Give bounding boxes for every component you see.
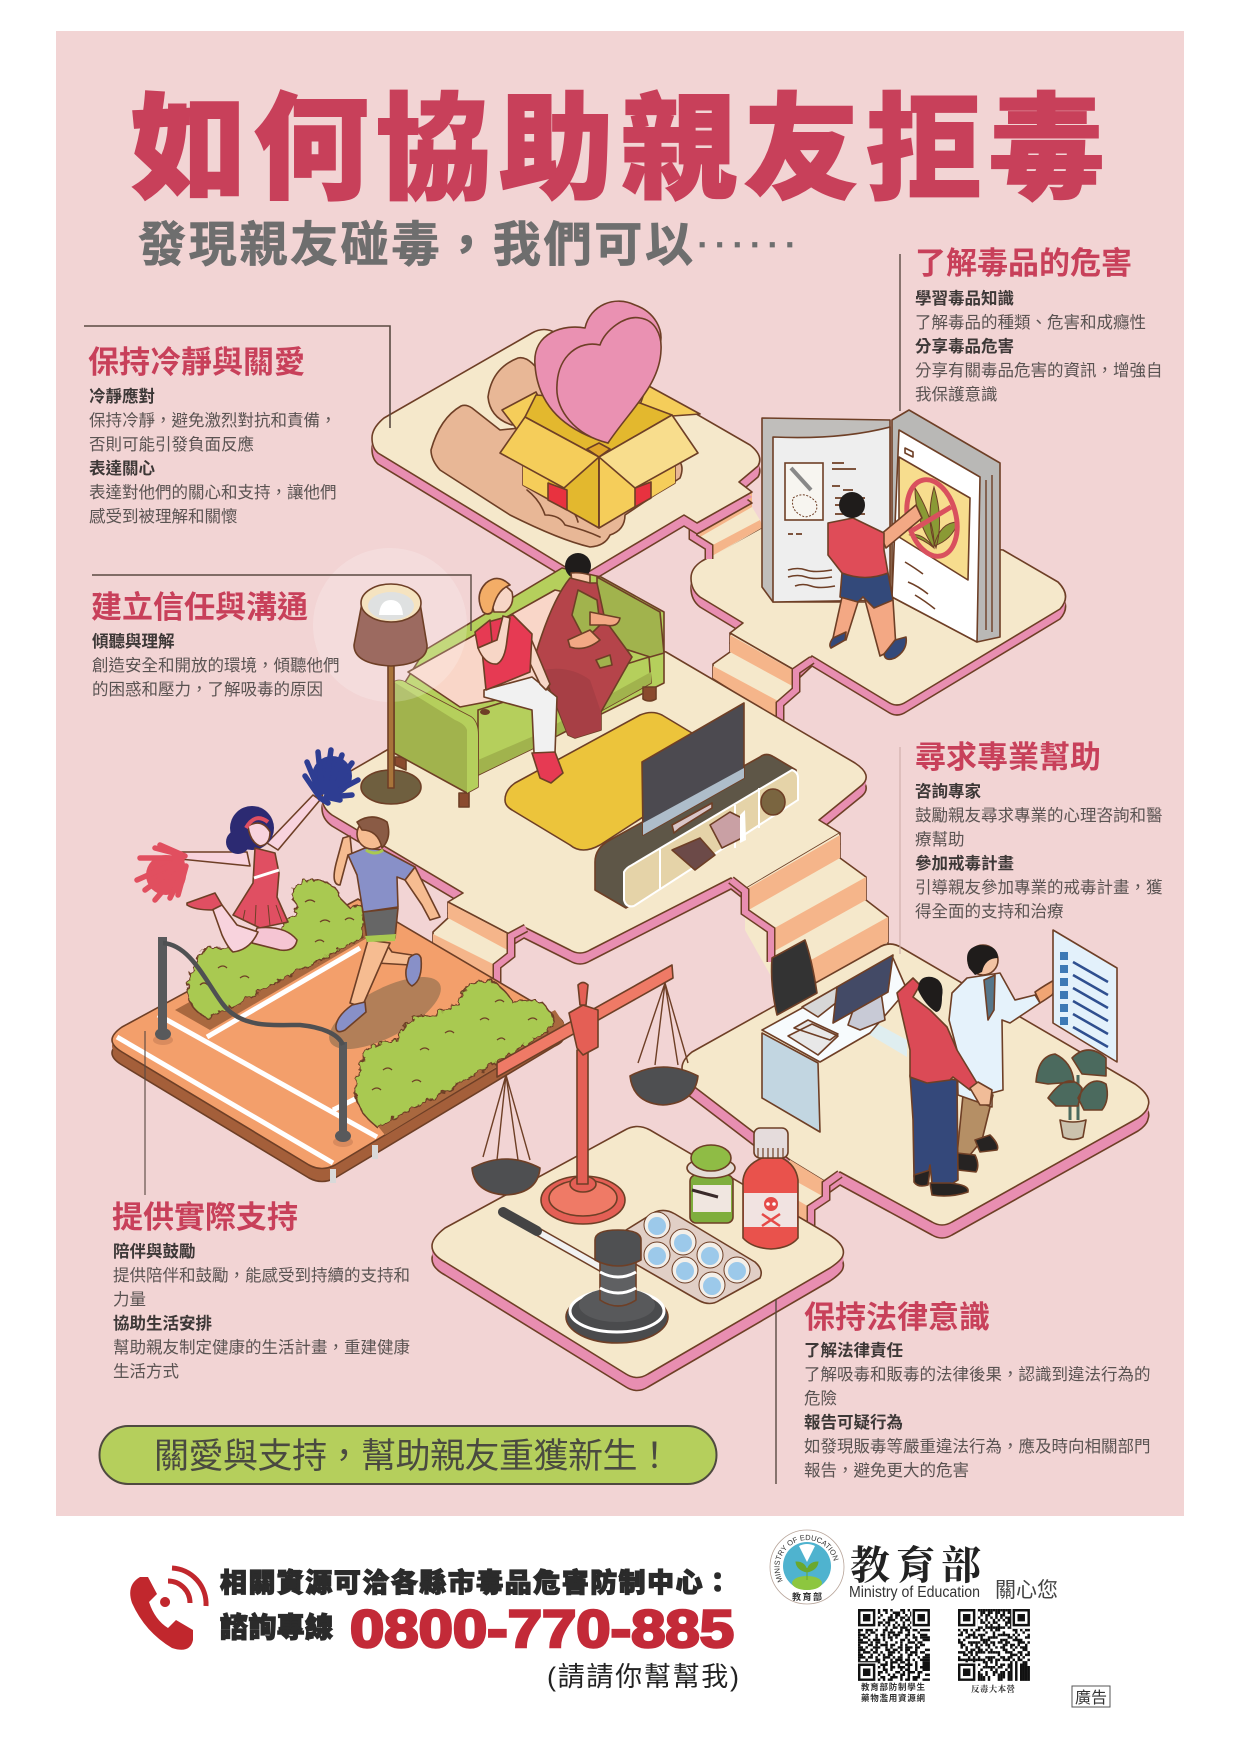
back flaps of box bbox=[502, 385, 700, 440]
back heart bbox=[535, 301, 661, 443]
illustration: track with runner and cheerleader bbox=[112, 750, 565, 1195]
body text: 力量 bbox=[113, 1290, 146, 1309]
green slogan banner bbox=[100, 1426, 716, 1484]
body text: 分享毒品危害 bbox=[915, 336, 1014, 356]
worried man bbox=[897, 977, 992, 1196]
illustration: man reading giant book bbox=[762, 254, 1000, 659]
body text: 創造安全和開放的環境，傾聽他們 bbox=[92, 656, 340, 675]
advertisement tag: 廣告 bbox=[1075, 1689, 1107, 1707]
subtitle: ...... bbox=[698, 221, 794, 254]
icon: phone with signal waves bbox=[130, 1568, 206, 1650]
monitor bbox=[833, 955, 893, 1030]
body text: 參加戒毒計畫 bbox=[915, 853, 1014, 873]
section: practical support bbox=[112, 1200, 410, 1381]
QR code 2 bbox=[957, 1608, 1032, 1683]
section: build trust and communication bbox=[91, 590, 340, 699]
body text: 陪伴與鼓勵 bbox=[113, 1242, 196, 1261]
runner shadow bbox=[319, 963, 451, 1063]
body text: 如發現販毒等嚴重違法行為，應及時向相關部門 bbox=[804, 1436, 1150, 1456]
cheerleader bbox=[137, 750, 358, 952]
logo: Ministry of Education seal: MINISTRY OF EDUCATION bbox=[774, 1534, 839, 1582]
illustration: hand holding box with heart bbox=[431, 301, 700, 547]
front heart bbox=[557, 318, 661, 443]
body text: 療幫助 bbox=[915, 830, 964, 849]
box faces bbox=[523, 457, 599, 528]
body text: 了解法律責任 bbox=[804, 1341, 904, 1360]
section: keep calm and care bbox=[84, 326, 390, 526]
stairs: doctor to legal bbox=[770, 1160, 840, 1226]
advertisement tag bbox=[1072, 1686, 1110, 1707]
leader line: track bbox=[144, 1031, 146, 1195]
Ministry of Education wordmark bbox=[849, 1534, 1058, 1602]
body text: 鼓勵親友尋求專業的心理咨詢和醫 bbox=[915, 806, 1162, 825]
blister pack bbox=[618, 1210, 761, 1304]
body text bbox=[915, 781, 1163, 921]
body text: 得全面的支持和治療 bbox=[915, 902, 1064, 921]
leader line: book bbox=[899, 254, 901, 411]
body text: 感受到被理解和關懷 bbox=[89, 506, 238, 526]
QR code 1 bbox=[857, 1608, 932, 1683]
body text: 報告可疑行為 bbox=[804, 1413, 903, 1432]
QR code 1 caption bbox=[861, 1682, 925, 1703]
box flaps bbox=[500, 417, 599, 488]
balance scale bbox=[472, 965, 698, 1224]
section: seek professional help bbox=[915, 740, 1163, 921]
helpline text: 相關資源可洽各縣市毒品危害防制中心： bbox=[220, 1567, 731, 1598]
logo: Ministry of Education seal bbox=[770, 1530, 844, 1604]
body text bbox=[804, 1341, 1150, 1480]
TV screen bbox=[642, 703, 744, 835]
body text bbox=[89, 386, 336, 526]
stairs: heart platform to book platform bbox=[684, 492, 763, 559]
lamp glow bbox=[313, 548, 467, 702]
body text: 幫助親友制定健康的生活計畫，重建健康 bbox=[113, 1338, 410, 1357]
platform: doctor scene base bbox=[682, 944, 1149, 1238]
QR code 1 caption: 藥物濫用資源網 bbox=[861, 1693, 925, 1703]
body text: 冷靜應對 bbox=[89, 386, 155, 406]
illustration: scales, gavel and medicines bbox=[472, 965, 798, 1343]
section: understand drug harm bbox=[915, 246, 1162, 404]
body text: 否則可能引發負面反應 bbox=[89, 434, 254, 454]
leader line: sofa bbox=[92, 575, 471, 631]
stairs: book platform to living room bbox=[713, 633, 812, 722]
helpline number: 0800-770-885 bbox=[350, 1600, 734, 1659]
track platform bbox=[112, 899, 564, 1183]
left page picture and text marks bbox=[785, 463, 935, 609]
leader line bbox=[775, 1300, 777, 1484]
blanket woman bbox=[536, 553, 632, 738]
red poison bottle bbox=[743, 1128, 798, 1249]
front bush bbox=[355, 981, 565, 1135]
floor lamp bbox=[354, 584, 427, 804]
body text: 了解毒品的種類、危害和成癮性 bbox=[915, 313, 1146, 332]
pink poster panel bbox=[56, 31, 1184, 1516]
stairs: living room to doctor bbox=[731, 833, 888, 1010]
Ministry of Education wordmark: 關心您 bbox=[995, 1579, 1058, 1602]
subtitle: 發現親友碰毒，我們可以 bbox=[138, 219, 693, 272]
platform: heart scene base bbox=[372, 330, 760, 585]
checklist poster bbox=[1053, 930, 1117, 1062]
leader line bbox=[84, 326, 390, 428]
leader line: doctor bbox=[899, 747, 901, 954]
doctor bbox=[949, 945, 1060, 1172]
right page bbox=[892, 430, 980, 642]
body text: 了解吸毒和販毒的法律後果，認識到違法行為的 bbox=[804, 1365, 1150, 1384]
platform: book scene base bbox=[691, 527, 1066, 715]
body text: 分享有關毒品危害的資訊，增強自 bbox=[915, 361, 1162, 380]
QR code 2 caption: 反毒大本營 bbox=[971, 1683, 1015, 1695]
rope posts bbox=[153, 937, 353, 1147]
heading: 建立信任與溝通 bbox=[91, 590, 308, 625]
platform: living room base bbox=[322, 620, 866, 964]
body text: 提供陪伴和鼓勵，能感受到持續的支持和 bbox=[113, 1265, 410, 1285]
body text: 的困惑和壓力，了解吸毒的原因 bbox=[92, 680, 323, 699]
desk bbox=[762, 958, 907, 1132]
body text: 保持冷靜，避免激烈對抗和責備， bbox=[89, 411, 336, 430]
back bush bbox=[175, 879, 372, 1030]
section: legal awareness bbox=[776, 1300, 1150, 1484]
stairs: living room to track bbox=[433, 902, 526, 985]
body text: 咨詢專家 bbox=[915, 781, 982, 801]
body text: 協助生活安排 bbox=[113, 1313, 212, 1333]
body text: 生活方式 bbox=[113, 1362, 179, 1381]
logo: Ministry of Education seal: 教育部 bbox=[792, 1591, 822, 1602]
illustration: doctor consultation scene bbox=[762, 747, 1117, 1196]
QR code 1 caption: 教育部防制學生 bbox=[861, 1682, 925, 1692]
potted plant bbox=[1036, 1050, 1107, 1140]
heading: 了解毒品的危害 bbox=[915, 246, 1132, 281]
green slogan banner: 關愛與支持，幫助親友重獲新生！ bbox=[154, 1437, 672, 1476]
red pompom bbox=[137, 845, 186, 900]
body text bbox=[915, 289, 1162, 404]
heading: 保持冷靜與關愛 bbox=[88, 345, 305, 380]
helpline mnemonic: (請請你幫幫我) bbox=[547, 1662, 739, 1692]
body text bbox=[92, 632, 340, 699]
body text: 表達關心 bbox=[89, 459, 156, 478]
helpline text bbox=[220, 1567, 731, 1643]
prohibition sign with leaf bbox=[899, 474, 965, 562]
TV cabinet bbox=[595, 754, 798, 908]
body text: 引導親友參加專業的戒毒計畫，獲 bbox=[915, 878, 1163, 897]
blonde woman bbox=[475, 578, 563, 783]
poster on right page bbox=[899, 457, 970, 580]
heading: 尋求專業幫助 bbox=[915, 740, 1101, 775]
page stacks bbox=[762, 418, 890, 602]
sofa bbox=[394, 568, 664, 807]
Ministry of Education wordmark: Ministry of Education bbox=[849, 1584, 980, 1601]
title: 如何協助親友拒毒 bbox=[131, 86, 1104, 214]
body text: 我保護意識 bbox=[915, 385, 998, 404]
body text bbox=[113, 1242, 410, 1381]
Ministry of Education wordmark: 教育部 bbox=[850, 1534, 981, 1591]
office chair bbox=[772, 940, 817, 1015]
blue pompom bbox=[305, 750, 358, 803]
helpline text: 諮詢專線 bbox=[220, 1611, 333, 1643]
skull and crossbones bbox=[762, 1197, 780, 1226]
body text: 傾聽與理解 bbox=[92, 632, 175, 651]
hand bbox=[431, 358, 682, 547]
heading: 提供實際支持 bbox=[112, 1200, 298, 1235]
body text: 報告，避免更大的危害 bbox=[804, 1461, 969, 1480]
body text: 危險 bbox=[804, 1389, 837, 1408]
green pill bottle bbox=[687, 1145, 735, 1223]
illustration: living room with sofa, women, rug and TV bbox=[92, 548, 798, 908]
body text: 學習毒品知識 bbox=[915, 289, 1014, 308]
rug bbox=[505, 712, 700, 850]
gavel bbox=[503, 1212, 668, 1343]
platform: legal scene base bbox=[432, 1126, 843, 1390]
runner bbox=[334, 817, 440, 1032]
man figure bbox=[828, 492, 922, 659]
heading: 保持法律意識 bbox=[804, 1300, 990, 1335]
body text: 表達對他們的關心和支持，讓他們 bbox=[89, 482, 336, 502]
